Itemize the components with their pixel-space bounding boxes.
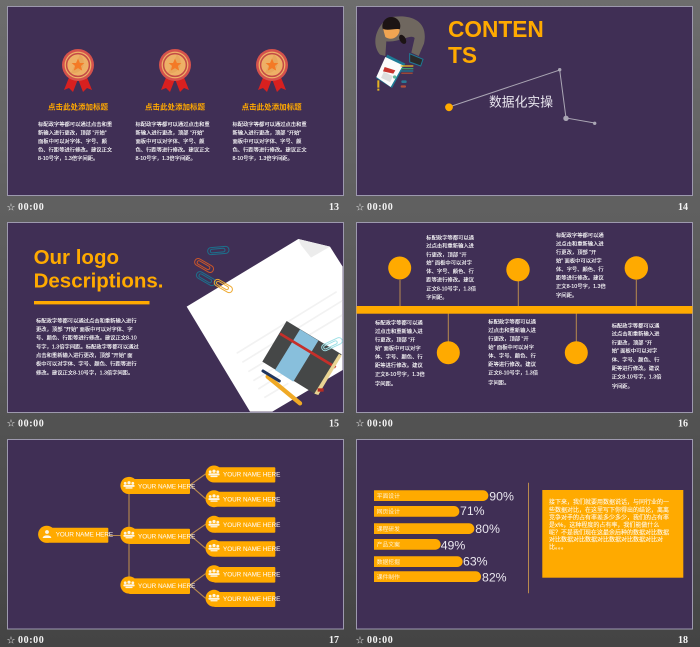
footer: slide 16: ☆ bbox=[356, 418, 364, 430]
text block: bottom 3: 字间距。 bbox=[612, 382, 633, 390]
footer: slide 13: ☆ bbox=[6, 202, 16, 214]
bar chart: 90% bbox=[489, 490, 514, 504]
footer: slide 16: 16 bbox=[678, 418, 688, 430]
footer: slide 17: 00:00 bbox=[18, 635, 44, 646]
text block: bottom 1: 体、字号、颜色、行 bbox=[375, 353, 423, 361]
node: level 3 item 4: YOUR NAME HERE bbox=[223, 546, 280, 553]
text block: top 1: 距等进行修改。建议 bbox=[426, 276, 475, 284]
node: level 2 top: YOUR NAME HERE bbox=[138, 484, 195, 491]
text block: bottom 1: 字间距。 bbox=[375, 379, 396, 387]
heading: our logo descriptions: Our logo bbox=[34, 246, 119, 269]
footer: slide 18: ☆ bbox=[356, 636, 364, 646]
text block: 标配政字等都可以通过点击和重新输入进行 bbox=[36, 317, 137, 325]
callout box: 接下来，我们就要用数据说话，与同行业的一 bbox=[549, 498, 669, 506]
node: level 3 item 4 bbox=[206, 540, 280, 557]
panel: slide 15 logo description bbox=[8, 222, 344, 412]
text block: top 1: 标配政字等都可以通 bbox=[426, 233, 475, 241]
text block: top 2 bbox=[556, 231, 606, 299]
footer: slide 15 bbox=[6, 418, 339, 430]
node: root bbox=[38, 526, 113, 543]
footer: slide 17: ☆ bbox=[6, 636, 16, 646]
node: level 3 item 3 bbox=[206, 516, 280, 533]
text block: bottom 3: 体、字号、颜色、行 bbox=[612, 355, 660, 363]
node: level 3 item 5 bbox=[206, 565, 280, 583]
text block: bottom 1: 正文8-10号字，1.3倍 bbox=[375, 370, 425, 378]
text block: column 1: 面板中可以对字体、字号、颜 bbox=[38, 137, 108, 145]
callout box: 呢？不是我们现在这最余后种的数据对比数据 bbox=[549, 529, 669, 537]
text block: bottom 1: 过点击和重新输入进 bbox=[375, 327, 423, 335]
text block: bottom 1: 始” 面板中可以对字 bbox=[375, 344, 421, 352]
text block: bottom 3: 标配政字等都可以通 bbox=[612, 321, 660, 329]
panel: slide 13 medals bbox=[8, 6, 344, 196]
node: level 2 middle: YOUR NAME HERE bbox=[138, 533, 195, 540]
text block: top 1: 过点击和重新输入进 bbox=[426, 242, 475, 250]
text block: column 1: 8-10号字，1.3倍字间距。 bbox=[38, 154, 98, 162]
text block: top 2: 正文8-10号字，1.3倍 bbox=[556, 282, 606, 290]
text block: bottom 1: 距等进行修改。建议 bbox=[375, 361, 423, 369]
text block: bottom 3: 行更改，顶部 “开 bbox=[612, 338, 653, 346]
node: level 2 bottom: YOUR NAME HERE bbox=[138, 583, 195, 590]
title: contents: TS bbox=[448, 42, 477, 68]
node: level 3 item 6 bbox=[206, 590, 280, 607]
text block: column 1: 标配政字等都可以通过点击和重 bbox=[38, 120, 113, 128]
text block: column 3: 新输入进行更改，顶部 “开始” bbox=[232, 128, 301, 136]
text block: top 2: 标配政字等都可以通 bbox=[556, 231, 604, 239]
footer: slide 18: 18 bbox=[678, 635, 688, 646]
text block: top 1: 正文8-10号字，1.3倍 bbox=[426, 284, 477, 292]
footer: slide 15: 00:00 bbox=[18, 418, 44, 430]
node: level 2 top bbox=[120, 477, 195, 494]
text block: column 1: 新输入进行更改，顶部 “开始” bbox=[38, 128, 107, 136]
illustration: paper, notebook, pen, clips bbox=[187, 239, 343, 412]
text block: bottom 2: 过点击和重新输入进 bbox=[488, 326, 537, 334]
footer: slide 13: 00:00 bbox=[18, 202, 44, 213]
text block: top 1: 体、字号、颜色、行 bbox=[426, 267, 475, 275]
bar chart: 课程研发 bbox=[377, 525, 400, 533]
text block: bottom 1: 行更改，顶部 “开 bbox=[375, 336, 416, 344]
footer: slide 14 bbox=[356, 202, 688, 214]
text block: bottom 2: 行更改，顶部 “开 bbox=[488, 335, 529, 343]
text block: top 2: 过点击和重新输入进 bbox=[556, 239, 604, 247]
text block: bottom 2: 字间距。 bbox=[488, 379, 510, 387]
text block: bottom 2: 距等进行修改。建议 bbox=[488, 360, 537, 368]
heading: column 1: 点击此处添加标题 bbox=[48, 101, 108, 111]
panel: slide 18 bar chart bbox=[356, 440, 692, 629]
text block: bottom 1: 标配政字等都可以通 bbox=[375, 319, 423, 327]
timeline nodes bbox=[388, 256, 648, 364]
text block: top 2: 行更改，顶部 “开 bbox=[556, 248, 597, 256]
text block: top 2: 距等进行修改。建议 bbox=[556, 273, 604, 281]
timeline bar bbox=[356, 306, 692, 314]
text block: bottom 3 bbox=[612, 321, 662, 390]
connectors bbox=[108, 474, 206, 598]
text block: 板中可以对字体、字号、颜色、行距等进行 bbox=[36, 360, 137, 368]
text block: column 3: 8-10号字，1.3倍字间距。 bbox=[232, 154, 293, 162]
footer: slide 18: 00:00 bbox=[367, 635, 393, 646]
text block: 号、颜色、行距等进行修改。建议正文8-10 bbox=[36, 334, 137, 342]
node: level 3 item 2: YOUR NAME HERE bbox=[223, 496, 280, 503]
text block: bottom 3: 始” 面板中可以对字 bbox=[612, 347, 657, 355]
footer: slide 13: 13 bbox=[329, 202, 339, 213]
text block: column 2: 标配政字等都可以通过点击和重 bbox=[136, 120, 210, 128]
text block: 号字，1.3倍字间距。标配政字等都可以通过 bbox=[36, 342, 139, 350]
bar chart: 63% bbox=[463, 554, 488, 568]
subtitle: 数据化实操 bbox=[489, 94, 553, 109]
callout box: 对比数据对比数据对比数据对比数据对比对 bbox=[549, 536, 663, 544]
bar chart: 平面设计 bbox=[377, 492, 400, 500]
node: level 3 item 5: YOUR NAME HERE bbox=[223, 572, 280, 579]
bar chart: 49% bbox=[441, 538, 465, 552]
footer: slide 15: 15 bbox=[329, 418, 339, 430]
callout box bbox=[542, 490, 683, 578]
node: level 3 item 1 bbox=[206, 466, 280, 482]
divider bbox=[528, 483, 530, 593]
panel: slide 17 organisation chart bbox=[8, 440, 344, 629]
text block: column 3: 色、行距等进行修改。建议正文 bbox=[232, 146, 307, 154]
text block: top 1 bbox=[426, 233, 477, 301]
text block: top 1: 行更改，顶部 “开 bbox=[426, 250, 467, 258]
text block: bottom 2: 正文8-10号字，1.3倍 bbox=[488, 369, 539, 377]
text block: bottom 3: 正文8-10号字，1.3倍 bbox=[612, 373, 662, 381]
text block: column 2: 面板中可以对字体、字号、颜 bbox=[136, 137, 205, 145]
node: root: YOUR NAME HERE bbox=[56, 532, 113, 539]
panel: slide 16 timeline bbox=[356, 222, 692, 412]
underline bbox=[34, 301, 150, 304]
callout box: 竞争对手的占有率差多少多少，我们的占有率 bbox=[549, 514, 669, 522]
node: level 2 middle bbox=[120, 527, 195, 544]
footer: slide 15: ☆ bbox=[6, 418, 16, 430]
text block: column 2 bbox=[136, 120, 210, 162]
text block: bottom 3: 距等进行修改。建议 bbox=[612, 364, 660, 372]
footer: slide 14: 00:00 bbox=[367, 202, 393, 213]
bar chart: 80% bbox=[475, 522, 500, 536]
callout box: 比。。。 bbox=[549, 543, 567, 551]
text block: column 2: 新输入进行更改，顶部 “开始” bbox=[136, 128, 204, 136]
text block: bottom 3: 过点击和重新输入进 bbox=[612, 330, 660, 338]
text block: column 2: 8-10号字，1.3倍字间距。 bbox=[136, 154, 196, 162]
icon: medal 3 bbox=[256, 49, 288, 92]
bar chart: 71% bbox=[460, 504, 485, 518]
node: level 3 item 3: YOUR NAME HERE bbox=[223, 522, 280, 529]
text block: bottom 2: 始” 面板中可以对字 bbox=[488, 343, 534, 351]
title: contents bbox=[448, 16, 544, 68]
text block: top 2: 始” 面板中可以对字 bbox=[556, 256, 602, 264]
footer: slide 17 bbox=[6, 635, 339, 646]
text block: top 2: 体、字号、颜色、行 bbox=[556, 265, 604, 273]
heading: our logo descriptions bbox=[34, 246, 163, 292]
node: level 3 item 6: YOUR NAME HERE bbox=[223, 596, 280, 603]
text block: column 3: 标配政字等都可以通过点击和重 bbox=[232, 120, 307, 128]
text block: top 2: 字间距。 bbox=[556, 291, 577, 299]
text block: 修改。建议正文8-10号字，1.3倍字间距。 bbox=[36, 368, 133, 376]
node: level 3 item 1: YOUR NAME HERE bbox=[223, 472, 280, 479]
callout box: 是x%，这种程度的占有率，我们能做什么 bbox=[549, 521, 659, 529]
footer: slide 17: 17 bbox=[329, 635, 339, 646]
title: contents: CONTEN bbox=[448, 16, 544, 42]
timeline stems bbox=[400, 280, 636, 342]
footer: slide 18 bbox=[356, 635, 688, 646]
node: level 3 item 2 bbox=[206, 490, 280, 507]
footer: slide 14: 14 bbox=[678, 202, 688, 213]
heading: column 2: 点击此处添加标题 bbox=[145, 101, 205, 111]
footer: slide 13 bbox=[6, 202, 339, 214]
text block: top 1: 字间距。 bbox=[426, 293, 448, 301]
text block: bottom 2: 标配政字等都可以通 bbox=[488, 318, 537, 326]
line chart decoration bbox=[445, 68, 596, 125]
text block: column 1: 色、行距等进行修改。建议正文 bbox=[38, 146, 113, 154]
node: level 2 bottom bbox=[120, 576, 195, 594]
bar chart bbox=[374, 490, 514, 584]
text block bbox=[36, 317, 139, 376]
icon: medal 1 bbox=[62, 49, 94, 92]
text block: bottom 1 bbox=[375, 319, 425, 387]
icon: medal 2 bbox=[159, 49, 191, 92]
text block: top 1: 始” 面板中可以对字 bbox=[426, 259, 472, 267]
bar chart: 数据挖掘 bbox=[377, 558, 400, 566]
text block: 点击和重新输入进行更改，顶部 “开始” 面 bbox=[36, 351, 133, 359]
bar chart: 产品文案 bbox=[377, 541, 400, 549]
icon: person working at desk bbox=[375, 16, 425, 91]
text block: column 1 bbox=[38, 120, 113, 162]
text block: bottom 2: 体、字号、颜色、行 bbox=[488, 352, 537, 360]
text block: column 3 bbox=[232, 120, 307, 162]
callout box: 些数据对比，在这里写下你得出的结论，离离 bbox=[549, 506, 669, 514]
bar chart: 课件制作 bbox=[377, 573, 400, 581]
panel: slide 14 contents bbox=[356, 6, 692, 196]
footer: slide 16: 00:00 bbox=[367, 418, 393, 430]
bar chart: 82% bbox=[482, 570, 507, 584]
heading: our logo descriptions: Descriptions. bbox=[34, 270, 163, 292]
footer: slide 14: ☆ bbox=[356, 202, 364, 214]
bar chart: 网页设计 bbox=[377, 508, 400, 516]
text block: column 3: 面板中可以对字体、字号、颜 bbox=[232, 137, 302, 145]
text block: column 2: 色、行距等进行修改。建议正文 bbox=[136, 146, 210, 154]
text block: bottom 2 bbox=[488, 318, 539, 387]
text block: 更改，顶部 “开始” 面板中可以对字体、字 bbox=[36, 325, 133, 333]
heading: column 3: 点击此处添加标题 bbox=[242, 101, 302, 111]
footer: slide 16 bbox=[356, 418, 688, 430]
